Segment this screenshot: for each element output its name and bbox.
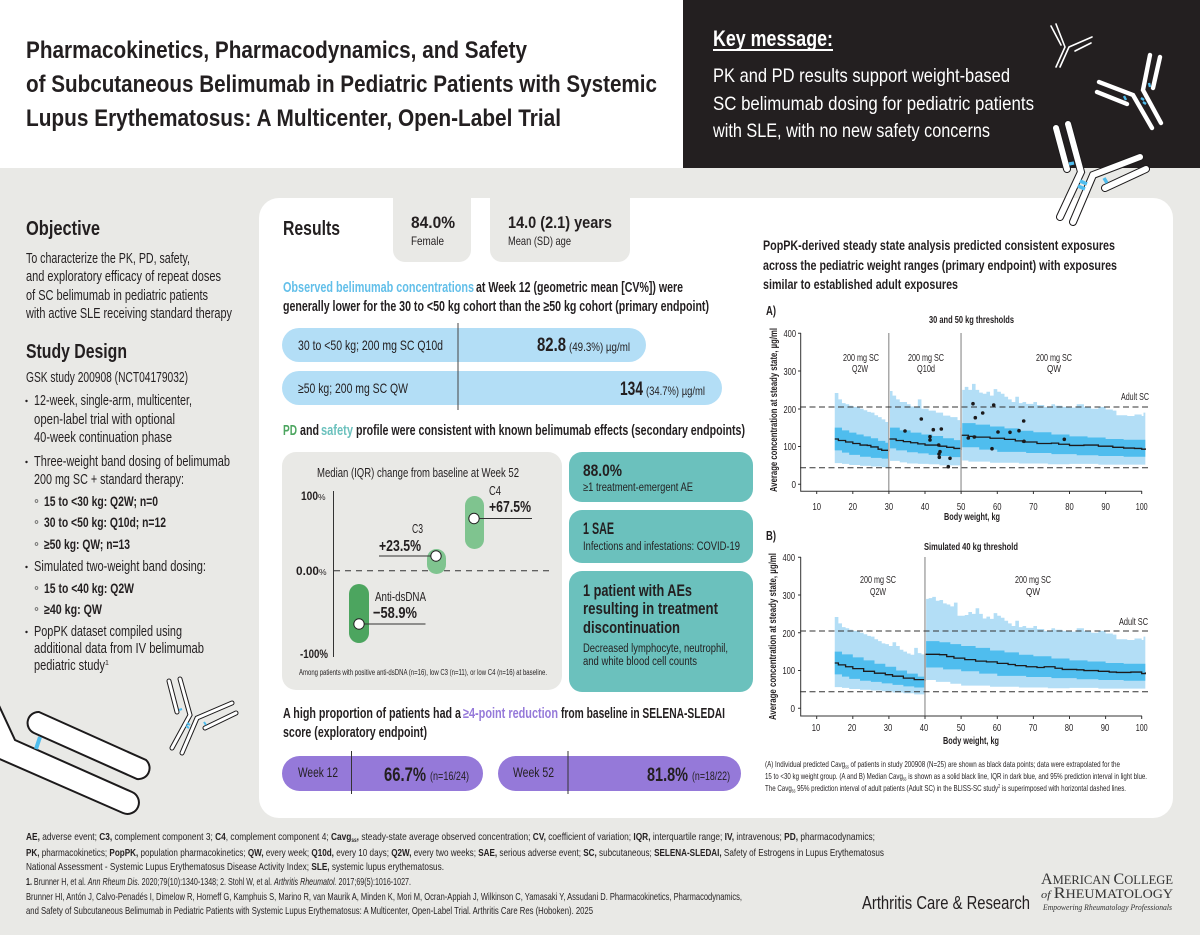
chart B: simulated 40 kg threshold: Q2W [870, 586, 886, 598]
objective text: of SC belimumab in pediatric patients [26, 288, 208, 304]
references [26, 876, 742, 917]
chart A: 30 and 50 kg thresholds: Average concentration at steady state, µg/ml [768, 328, 780, 492]
key message heading: Key message: [713, 26, 833, 51]
panel: median change chart [282, 452, 562, 690]
chart B: simulated 40 kg threshold: 200 mg SC [1015, 574, 1051, 586]
bar: week 12: Week 12 [298, 764, 338, 780]
bar: week 52: (n=18/22) [692, 769, 730, 783]
icon: large antibody top right [1056, 124, 1146, 222]
logo: American College of Rheumatology: AMERICAN COLLEGE [1041, 871, 1173, 888]
chart B: simulated 40 kg threshold: 100 [1136, 722, 1148, 734]
chart axis: -100% [300, 649, 328, 661]
chart B: simulated 40 kg threshold: 300 [782, 590, 795, 602]
chart A: 30 and 50 kg thresholds: 200 mg SC [843, 352, 879, 364]
chart B: simulated 40 kg threshold: 90 [1101, 722, 1109, 734]
panel: key message [683, 0, 1200, 168]
chart A: 30 and 50 kg thresholds: A) [766, 303, 776, 318]
study design list: ≥50 kg: QW; n=13 [44, 537, 130, 552]
PD and safety statement: profile were consistent with known belimumab effects (secondary endpoints) [356, 423, 745, 439]
results heading: Results [283, 218, 340, 240]
chart footnote text: ss [903, 776, 907, 782]
chart B: simulated 40 kg threshold: 50 [957, 722, 965, 734]
objective text [25, 251, 233, 322]
chart A: 30 and 50 kg thresholds: 400 [784, 328, 796, 340]
SELENA-SLEDAI statement: ≥4-point reduction [463, 706, 558, 722]
panel: study design [25, 341, 230, 674]
panel: results background [259, 198, 1173, 818]
bar: week 12: (n=16/24) [430, 769, 469, 783]
chart B: simulated 40 kg threshold: Average concentration at steady state, µg/ml [767, 553, 779, 720]
chart A: 30 and 50 kg thresholds: 30 and 50 kg thresholds [929, 315, 1014, 326]
chart A: 30 and 50 kg thresholds: 60 [993, 501, 1002, 513]
chart B: simulated 40 kg threshold: 100 [782, 665, 795, 677]
chart A: 30 and 50 kg thresholds: Q10d [917, 363, 935, 375]
C4 marker [465, 484, 532, 549]
chart footnote text: The Cavg [765, 783, 802, 793]
bar: week 12 [282, 751, 483, 794]
SELENA-SLEDAI statement [283, 706, 725, 741]
study design list: Three-weight band dosing of belimumab [34, 454, 230, 470]
chart A: 30 and 50 kg thresholds: 50 [957, 501, 965, 513]
chart footnote text: 15 to <30 kg weight group. (A and B) Median Cavg [765, 771, 956, 781]
bar: week 52: Week 52 [513, 764, 554, 780]
references: and Safety of Subcutaneous Belimumab in Pediatric Patients with Systemic Lupus Erythematosus: A Multicenter, Open-Label Trial. Arthritis Care Res (Hoboken). 2025 [26, 905, 593, 917]
key message text [712, 65, 1034, 142]
chart B: simulated 40 kg threshold: 30 [884, 722, 892, 734]
study design list: 15 to <30 kg: Q2W; n=0 [44, 494, 158, 509]
bar: 30 to <50 kg: 30 to <50 kg; 200 mg SC Q10d [298, 337, 443, 353]
chart axis: % [319, 567, 327, 577]
bar: 30 to <50 kg: (49.3%) µg/ml [569, 340, 630, 354]
PopPK statement: similar to established adult exposures [763, 277, 958, 292]
chart B: simulated 40 kg threshold: 0 [790, 703, 795, 715]
study design list: additional data from IV belimumab [34, 641, 204, 657]
card: SAE: Infections and infestations: COVID-19 [583, 541, 740, 553]
study design list: pediatric study [34, 658, 106, 674]
abbreviations: ss [351, 838, 357, 844]
title: of Subcutaneous Belimumab in Pediatric Patients with Systemic [26, 71, 657, 98]
chart A: 30 and 50 kg thresholds: 30 [885, 501, 893, 513]
chart A: 30 and 50 kg thresholds: 40 [921, 501, 929, 513]
card: treatment discontinuation [569, 571, 753, 692]
stat card: age: 14.0 (2.1) years [508, 213, 612, 232]
chart B: simulated 40 kg threshold: B) [766, 528, 776, 543]
chart A: 30 and 50 kg thresholds: Body weight, kg [944, 511, 1000, 523]
chart A: 30 and 50 kg thresholds: 100 [784, 441, 796, 453]
stat card: age [490, 198, 630, 262]
chart A: 30 and 50 kg thresholds: 80 [1065, 501, 1074, 513]
chart footnote text [765, 759, 1147, 794]
card: treatment-emergent AE: 88.0% [583, 461, 622, 480]
objective text: To characterize the PK, PD, safety, [26, 251, 190, 267]
bar: 50 kg and over: ≥50 kg; 200 mg SC QW [298, 380, 409, 396]
study design list: 1 [105, 660, 109, 667]
PD and safety statement [283, 423, 745, 439]
card: SAE: 1 SAE [583, 519, 614, 538]
chart A: 30 and 50 kg thresholds: Q2W [852, 363, 868, 375]
PD and safety statement: and [300, 423, 319, 439]
study design list: PopPK dataset compiled using [34, 624, 182, 640]
chart A: 30 and 50 kg thresholds: 200 [784, 404, 796, 416]
card: treatment-emergent AE [569, 452, 753, 502]
chart B: simulated 40 kg threshold: 200 mg SC [860, 574, 896, 586]
chart B: simulated 40 kg threshold: 40 [920, 722, 928, 734]
chart axis: 0.00 [296, 566, 319, 578]
card: treatment-emergent AE: ≥1 treatment-emergent AE [583, 482, 693, 494]
references: 1. Brunner H, et al. Ann Rheum Dis. 2020;79(10):1340-1348; 2. Stohl W, et al. Arthritis Rheumatol. 2017;69(5):1016-1027. [26, 876, 411, 888]
chart axis: % [318, 492, 326, 502]
card: SAE [569, 510, 753, 563]
title panel [0, 0, 683, 168]
bar: 50 kg and over [282, 371, 722, 405]
concentrations statement: at Week 12 (geometric mean [CV%]) were [476, 280, 683, 296]
stat card: female: Female [411, 234, 444, 248]
icon: medium antibody top right [1097, 55, 1161, 128]
chart A: 30 and 50 kg thresholds: Adult SC [1121, 391, 1149, 403]
PD and safety statement: PD [283, 423, 297, 439]
chart B: simulated 40 kg threshold: Simulated 40 kg threshold [924, 542, 1018, 553]
chart B: simulated 40 kg threshold: 400 [782, 552, 795, 564]
chart A: 30 and 50 kg thresholds: 20 [849, 501, 857, 513]
concentrations statement: Observed belimumab concentrations [283, 280, 474, 296]
objective heading: Objective [26, 218, 100, 240]
stat card: female: 84.0% [411, 213, 455, 232]
key message text: SC belimumab dosing for pediatric patients [713, 93, 1034, 115]
chart footnote text: 2 [998, 784, 1000, 790]
chart footnote text: (A) Individual predicted Cavg [765, 759, 874, 769]
PopPK statement: PopPK-derived steady state analysis predicted consistent exposures [763, 238, 1115, 253]
bar: 30 to <50 kg [282, 328, 646, 362]
abbreviations: PK, pharmacokinetics; PopPK, population pharmacokinetics; QW, every week; Q10d, every 10 days; Q2W, every two weeks; SAE, serious adverse event; SC, subcutaneous; SELENA-SLEDAI, Safety of Estrogens in Lupus Erythematosus [26, 847, 884, 859]
logo: American College of Rheumatology: of RHEUMATOLOGY [1041, 885, 1173, 902]
chart footnote text: ss [792, 788, 796, 794]
icon: small antibody bottom left [169, 679, 236, 753]
SELENA-SLEDAI statement: score (exploratory endpoint) [283, 725, 427, 741]
chart B: simulated 40 kg threshold: 60 [993, 722, 1001, 734]
chart A: 30 and 50 kg thresholds [766, 303, 1150, 523]
chart A: 30 and 50 kg thresholds: 200 mg SC [1036, 352, 1072, 364]
chart B: simulated 40 kg threshold: Adult SC [1119, 616, 1148, 628]
chart axis: 100 [301, 491, 318, 503]
card: treatment discontinuation: Decreased lymphocyte, neutrophil, [583, 643, 728, 655]
study design list: 200 mg SC + standard therapy: [34, 472, 184, 488]
C4 marker: C4 [489, 484, 501, 498]
study design heading: Study Design [26, 341, 127, 363]
chart B: simulated 40 kg threshold: 200 [782, 628, 795, 640]
abbreviations: steady-state average observed concentration; CV, coefficient of variation; IQR, interquartile range; IV, intravenous; PD, pharmacodynamics; [362, 831, 895, 843]
PopPK statement [763, 238, 1117, 292]
chart B: simulated 40 kg threshold: 20 [848, 722, 856, 734]
chart A: 30 and 50 kg thresholds: 100 [1136, 501, 1148, 513]
C4 marker: +67.5% [489, 499, 531, 516]
objective text: with active SLE receiving standard therapy [25, 306, 233, 322]
SELENA-SLEDAI statement: A high proportion of patients had a [283, 706, 462, 722]
icon: large antibody bottom left [0, 697, 150, 814]
study design list: 15 to <40 kg: Q2W [44, 581, 134, 596]
chart axis [296, 491, 549, 661]
chart footnote text: ss [845, 764, 849, 770]
icon: small antibody top right [1051, 24, 1092, 67]
study design list: ≥40 kg: QW [44, 602, 102, 617]
concentrations statement [283, 280, 709, 315]
study design list: 40-week continuation phase [34, 430, 172, 446]
title: Lupus Erythematosus: A Multicenter, Open-Label Trial [26, 105, 561, 132]
abbreviations: AE, adverse event; C3, complement component 3; C4, complement component 4; Cavg [26, 831, 357, 843]
bar: 50 kg and over: 134 [620, 379, 643, 400]
study design list: Simulated two-weight band dosing: [34, 559, 206, 575]
C3 marker: C3 [412, 522, 423, 536]
bar: week 52 [498, 751, 741, 794]
C3 marker [379, 522, 446, 574]
abbreviations: National Assessment - Systemic Lupus Erythematosus Disease Activity Index; SLE, systemic lupus erythematosus. [26, 861, 444, 873]
title [26, 37, 657, 132]
card: treatment discontinuation: discontinuation [583, 619, 680, 637]
key message text: with SLE, with no new safety concerns [712, 120, 990, 142]
key message text: PK and PD results support weight-based [713, 65, 1010, 87]
anti-dsDNA marker: Anti-dsDNA [375, 590, 427, 604]
chart title: Median (IQR) change from baseline at Week 52 [317, 466, 519, 480]
chart A: 30 and 50 kg thresholds: 300 [784, 366, 796, 378]
card: treatment discontinuation: resulting in treatment [583, 600, 718, 618]
PopPK statement: across the pediatric weight ranges (primary endpoint) with exposures [763, 258, 1117, 273]
study design list: 30 to <50 kg: Q10d; n=12 [44, 515, 166, 530]
chart A: 30 and 50 kg thresholds: 90 [1101, 501, 1110, 513]
stat card: female [393, 198, 471, 262]
anti-dsDNA marker: −58.9% [373, 605, 417, 622]
chart B: simulated 40 kg threshold: 10 [812, 722, 820, 734]
chart B: simulated 40 kg threshold: Body weight, kg [943, 735, 999, 747]
title: Pharmacokinetics, Pharmacodynamics, and Safety [26, 37, 528, 64]
logo: American College of Rheumatology [1041, 871, 1173, 912]
study design list: GSK study 200908 (NCT04179032) [26, 370, 188, 386]
chart B: simulated 40 kg threshold: 80 [1065, 722, 1073, 734]
chart footnote: Among patients with positive anti-dsDNA (n=16), low C3 (n=11), or low C4 (n=16) at baseline. [299, 668, 547, 677]
panel: objective [25, 218, 233, 322]
chart footnote text: is superimposed with horizontal dashed lines. [1000, 783, 1126, 793]
chart B: simulated 40 kg threshold: 70 [1029, 722, 1037, 734]
stat card: age: Mean (SD) age [508, 234, 571, 248]
card: treatment discontinuation: 1 patient with AEs [583, 582, 692, 600]
objective text: and exploratory efficacy of repeat doses [26, 269, 221, 285]
chart A: 30 and 50 kg thresholds: 10 [812, 501, 821, 513]
PD and safety statement: safety [321, 423, 353, 439]
chart A: 30 and 50 kg thresholds: 0 [792, 479, 796, 491]
study design list [25, 370, 230, 674]
SELENA-SLEDAI statement: from baseline in SELENA-SLEDAI [561, 706, 725, 722]
journal name: Arthritis Care & Research [862, 893, 1030, 913]
chart A: 30 and 50 kg thresholds: 70 [1029, 501, 1038, 513]
study design list: 12-week, single-arm, multicenter, [34, 393, 192, 409]
chart footnote text: 95% prediction interval of adult patients (Adult SC) in the BLISS-SC study [795, 783, 999, 793]
concentrations statement: generally lower for the 30 to <50 kg cohort than the ≥50 kg cohort (primary endpoint) [283, 299, 709, 315]
card: treatment discontinuation: and white blood cell counts [583, 656, 697, 668]
chart A: 30 and 50 kg thresholds: 200 mg SC [908, 352, 944, 364]
abbreviations: , [357, 831, 359, 843]
chart A: 30 and 50 kg thresholds: QW [1047, 363, 1061, 375]
bar: 30 to <50 kg: 82.8 [537, 335, 566, 356]
bar: week 12: 66.7% [384, 765, 426, 786]
bar: week 52: 81.8% [647, 765, 688, 786]
bar: 50 kg and over: (34.7%) µg/ml [646, 384, 705, 398]
C3 marker: +23.5% [379, 538, 421, 555]
references: Brunner HI, Antón J, Calvo-Penadés I, Dimelow R, Horneff G, Kamphuis S, Marino R, van Maurik A, Minden K, Mori M, Ocran-Appiah J, Wilkinson C, Yamasaki Y, Assudani D. Pharmacokinetics, Pharmacodynamics, [26, 891, 742, 903]
abbreviations [26, 831, 884, 873]
logo: American College of Rheumatology: Empowering Rheumatology Professionals [1042, 903, 1172, 912]
chart B: simulated 40 kg threshold [766, 528, 1150, 747]
chart B: simulated 40 kg threshold: QW [1026, 586, 1040, 598]
anti-dsDNA marker [349, 584, 427, 643]
study design list: open-label trial with optional [34, 412, 175, 428]
